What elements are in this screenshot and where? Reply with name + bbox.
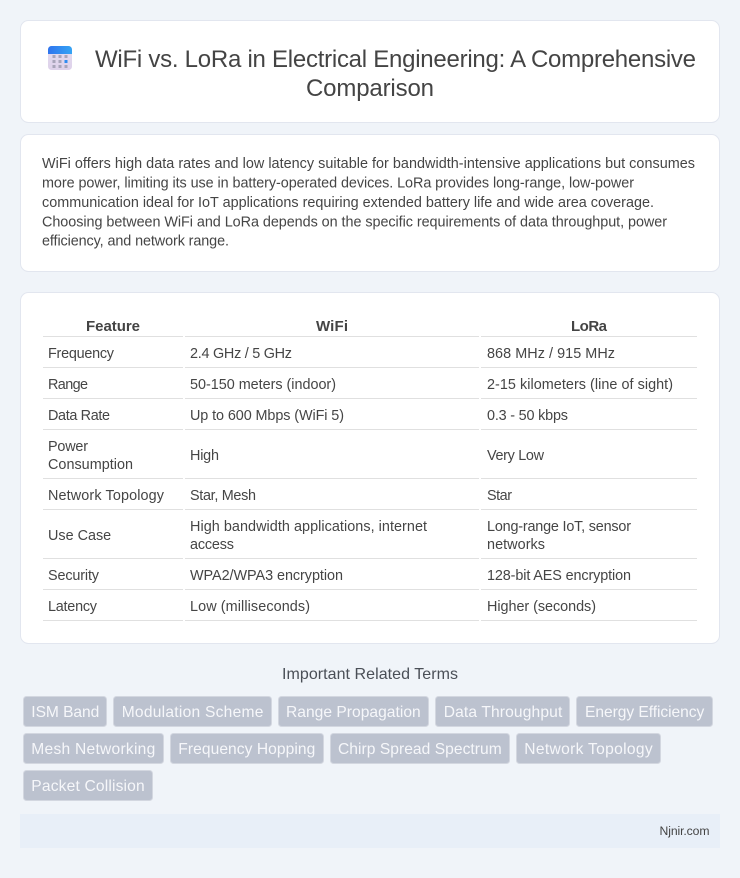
footer (20, 814, 720, 848)
icon: calendar (48, 46, 72, 70)
row: network topology (43, 488, 697, 510)
row: latency: Higher (seconds) (487, 599, 596, 615)
row: data rate: Data Rate (48, 408, 110, 424)
row: network topology: Star, Mesh (190, 488, 256, 504)
row: latency: Low (milliseconds) (190, 599, 310, 615)
panel: comparison table (20, 292, 720, 644)
row: power consumption: Power (48, 439, 88, 455)
tag: Network Topology: Network Topology (524, 741, 653, 758)
tag: Modulation Scheme: Modulation Scheme (122, 704, 263, 721)
row: range: 50-150 meters (indoor) (190, 377, 336, 393)
summary text (42, 156, 695, 250)
tag: Data Throughput: Data Throughput (444, 704, 563, 721)
row: data rate: Up to 600 Mbps (WiFi 5) (190, 408, 344, 424)
title: WiFi vs. LoRa in Electrical Engineering: A Comprehensive (95, 46, 696, 73)
tag: Range Propagation (278, 696, 428, 726)
panel: header (20, 20, 720, 122)
tag: Chirp Spread Spectrum (330, 734, 510, 764)
tag: Energy Efficiency (576, 696, 712, 726)
summary text: communication ideal for IoT applications requiring extended battery life and wide area coverage. (42, 195, 654, 211)
row: power consumption: Consumption (48, 457, 133, 473)
row: use case: access (190, 537, 234, 553)
panel: summary (20, 134, 720, 272)
tag: ISM Band: ISM Band (31, 704, 99, 721)
tag: Network Topology (516, 734, 660, 764)
row: power consumption: High (190, 448, 219, 464)
row: use case: networks (487, 537, 545, 553)
tag: ISM Band (24, 696, 106, 726)
table header row: Feature (86, 318, 140, 335)
tag: Mesh Networking: Mesh Networking (31, 741, 155, 758)
row: security: 128-bit AES encryption (487, 568, 631, 584)
row: power consumption (43, 439, 697, 479)
row: security: WPA2/WPA3 encryption (190, 568, 343, 584)
row: range: 2-15 kilometers (line of sight) (487, 377, 673, 393)
row: data rate: 0.3 - 50 kbps (487, 408, 568, 424)
tag: Chirp Spread Spectrum: Chirp Spread Spectrum (338, 741, 502, 758)
panel: related term tags (24, 696, 712, 800)
title: Comparison (306, 75, 434, 102)
table header row (43, 318, 697, 337)
row: power consumption: Very Low (487, 448, 545, 464)
row: latency (43, 599, 697, 621)
row: frequency: Frequency (48, 346, 115, 362)
tag: Frequency Hopping (170, 734, 324, 764)
row: frequency (43, 346, 697, 368)
tag: Range Propagation: Range Propagation (286, 704, 421, 721)
tag: Modulation Scheme (114, 696, 272, 726)
row: data rate (43, 408, 697, 430)
summary text: Choosing between WiFi and LoRa depends on the specific requirements of data throughput, power (42, 214, 667, 230)
table header row: LoRa (571, 318, 608, 335)
tag: Packet Collision (24, 770, 152, 800)
row: security (43, 568, 697, 590)
row: range: Range (48, 377, 88, 393)
row: frequency: 868 MHz / 915 MHz (487, 346, 615, 362)
row: use case: Long-range IoT, sensor (487, 519, 631, 535)
tag: Frequency Hopping: Frequency Hopping (178, 741, 315, 758)
tag: Packet Collision: Packet Collision (31, 778, 145, 795)
heading: important related terms: Important Related Terms (282, 666, 458, 683)
title (95, 46, 696, 102)
row: use case: Use Case (48, 528, 111, 544)
row: latency: Latency (48, 599, 98, 615)
row: use case (43, 519, 697, 559)
summary text: WiFi offers high data rates and low latency suitable for bandwidth-intensive applications but consumes (42, 156, 695, 172)
tag: Mesh Networking (24, 734, 164, 764)
row: range (43, 377, 697, 399)
tag: Energy Efficiency: Energy Efficiency (585, 704, 705, 721)
row: frequency: 2.4 GHz / 5 GHz (190, 346, 292, 362)
row: network topology: Network Topology (48, 488, 165, 504)
row: use case: High bandwidth applications, internet (190, 519, 427, 535)
table header row: WiFi (316, 318, 348, 335)
summary text: more power, limiting its use in battery-operated devices. LoRa provides long-range, low-power (42, 175, 634, 191)
tag: Data Throughput (436, 696, 570, 726)
footer: Njnir.com (660, 824, 710, 838)
row: security: Security (48, 568, 100, 584)
summary text: efficiency, and network range. (42, 234, 229, 250)
row: network topology: Star (487, 488, 512, 504)
